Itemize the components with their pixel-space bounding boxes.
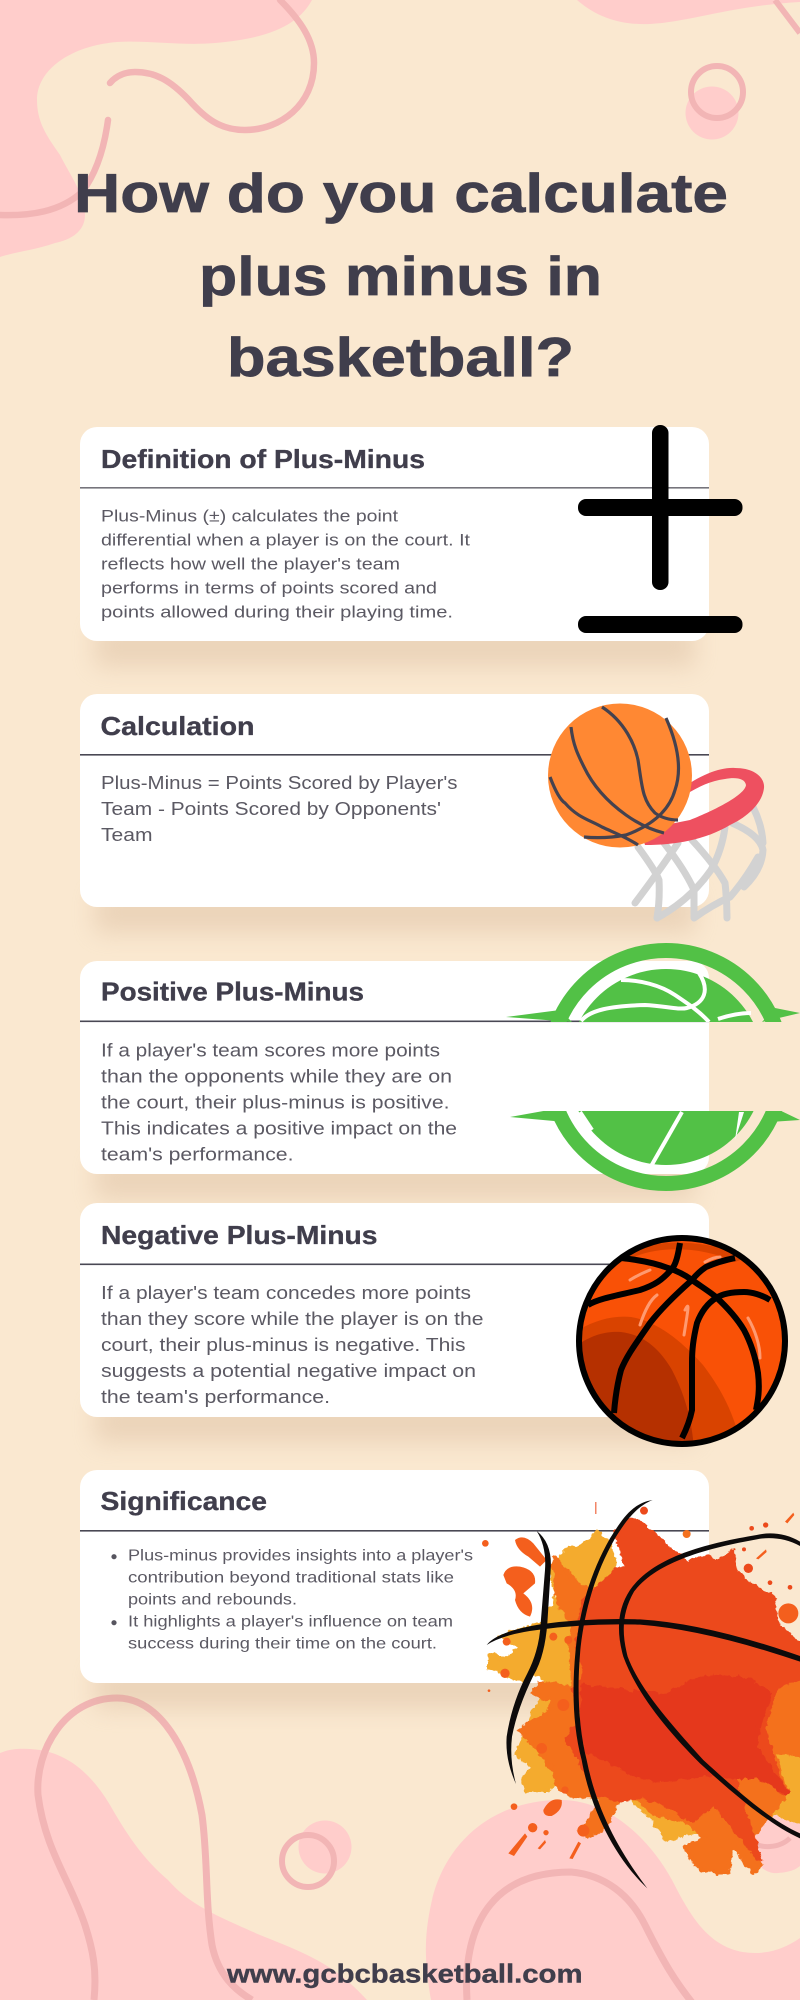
text block: positive: If a player's team scores more points <box>101 1040 440 1060</box>
text block: calculation: Team <box>101 825 152 845</box>
text block: positive: This indicates a positive impact on the <box>101 1118 457 1138</box>
title: How do you calculate <box>74 162 728 224</box>
decorative blobs: top right <box>577 0 800 140</box>
text block: positive: team's performance. <box>101 1144 294 1164</box>
bullet list: significance: success during their time on the court. <box>128 1636 437 1653</box>
splash droplets: red <box>595 1502 792 1590</box>
splash droplets <box>482 1513 798 1859</box>
title <box>74 162 728 388</box>
text block: positive <box>101 1040 457 1164</box>
text block: definition: points allowed during their playing time. <box>101 602 453 622</box>
text block: definition: Plus-Minus (±) calculates the point <box>101 506 398 526</box>
text block: calculation <box>101 773 458 845</box>
text block: negative: court, their plus-minus is negative. This <box>101 1335 466 1355</box>
bullet list: significance: Plus-minus provides insights into a player's <box>128 1548 473 1565</box>
icon: green basketball cut by band <box>506 950 800 1184</box>
text block: negative: If a player's team concedes more points <box>101 1283 471 1303</box>
seams: splash ball <box>487 1500 800 1888</box>
text block: definition: reflects how well the player's team <box>101 554 400 574</box>
bullet list: significance: contribution beyond traditional stats like <box>128 1570 454 1587</box>
panel: calculation <box>80 694 709 933</box>
icon: orange basketball and hoop <box>548 704 764 918</box>
heading: calculation: Calculation <box>100 711 254 741</box>
text block: definition: differential when a player is on the court. It <box>101 530 470 550</box>
text block: negative: suggests a potential negative impact on <box>101 1361 476 1381</box>
heading: positive: Positive Plus-Minus <box>101 976 364 1006</box>
title: plus minus in <box>199 245 602 307</box>
text block: calculation: Team - Points Scored by Opponents' <box>101 799 441 819</box>
text block: definition <box>101 506 470 622</box>
text block: negative: than they score while the player is on the <box>101 1309 484 1329</box>
panel: significance <box>80 1470 709 1709</box>
panel: positive plus-minus <box>80 961 709 1200</box>
icon: paint splash basketball <box>482 1500 800 1888</box>
text block: positive: the court, their plus-minus is positive. <box>101 1092 450 1112</box>
heading: negative: Negative Plus-Minus <box>101 1220 378 1250</box>
text block: definition: performs in terms of points scored and <box>101 578 437 598</box>
panel: definition of plus-minus <box>80 427 709 667</box>
bullet list: significance: points and rebounds. <box>128 1592 297 1609</box>
footer website url: www.gcbcbasketball.com <box>226 1958 582 1988</box>
text block: negative: the team's performance. <box>101 1387 330 1407</box>
bullet list: significance <box>111 1548 473 1653</box>
panel: negative plus-minus <box>80 1203 709 1443</box>
title: basketball? <box>227 326 574 388</box>
heading: significance: Significance <box>100 1486 267 1516</box>
icon: red-orange basketball with black outline <box>570 1237 786 1450</box>
text block: calculation: Plus-Minus = Points Scored by Player's <box>101 773 458 793</box>
text block: negative <box>101 1283 484 1407</box>
decorative blobs: top left <box>0 0 314 257</box>
heading: definition: Definition of Plus-Minus <box>101 444 425 474</box>
text block: positive: than the opponents while they are on <box>101 1066 452 1086</box>
decorative blobs: bottom left <box>0 1698 367 2000</box>
splash paint layers <box>490 1520 800 1873</box>
decorative blobs: bottom right <box>426 1790 800 2000</box>
icon: plus-minus sign <box>578 425 742 633</box>
bullet list: significance: It highlights a player's influence on team <box>128 1614 453 1631</box>
